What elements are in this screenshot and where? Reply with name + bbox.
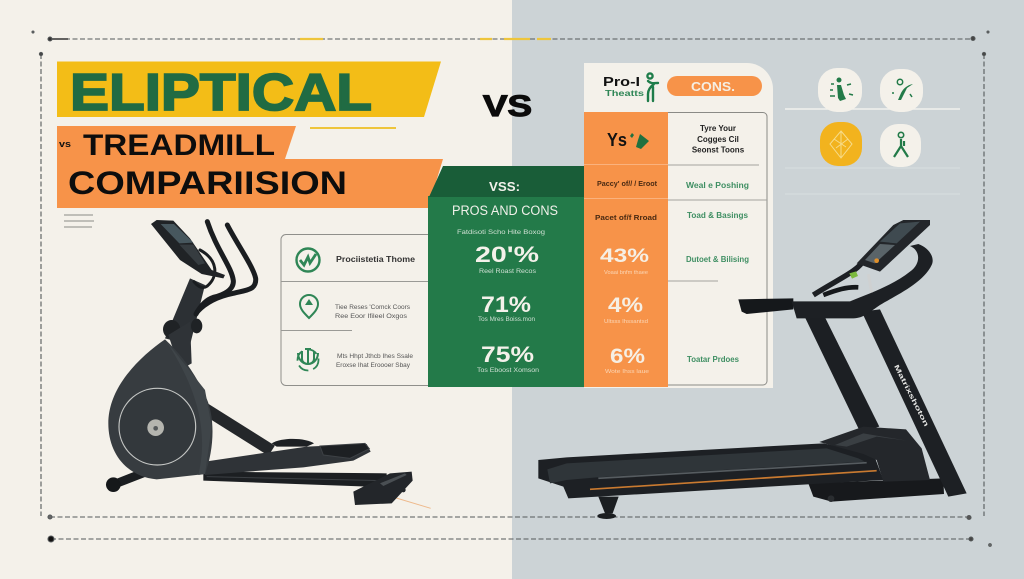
title banner: treadmill: vs bbox=[59, 139, 71, 149]
icon: anchor cup bbox=[298, 349, 318, 370]
rear rail bbox=[202, 407, 272, 451]
main upright bbox=[862, 309, 967, 497]
side rail highlight bbox=[598, 463, 867, 478]
right row labels: Dutoet & Bilising bbox=[686, 255, 749, 264]
elliptical machine bbox=[106, 220, 431, 508]
stat 43 percent bbox=[600, 246, 649, 276]
panel: left feature list bbox=[281, 234, 441, 386]
stat 75 percent: 75% bbox=[481, 342, 534, 367]
green header band bbox=[429, 166, 585, 197]
title banner: eliptical bbox=[57, 62, 441, 122]
feature label 2 bbox=[335, 304, 411, 320]
icon: yellow badge bbox=[820, 122, 862, 166]
orange header ys bbox=[607, 130, 649, 150]
vs heading: VS bbox=[483, 90, 532, 123]
background: right half bbox=[512, 0, 1024, 579]
console bbox=[151, 220, 225, 278]
menu lines icon bbox=[64, 215, 94, 227]
stat 20 percent: Reel Roast Recos bbox=[479, 269, 536, 275]
moving handles bbox=[194, 222, 256, 314]
deck bbox=[538, 443, 883, 498]
icon: exercise figure 2 bbox=[880, 69, 923, 112]
flywheel housing bbox=[108, 339, 213, 479]
running belt bbox=[547, 448, 865, 483]
pedal arm bbox=[205, 444, 371, 475]
orange row labels bbox=[595, 181, 658, 222]
console bbox=[823, 220, 930, 295]
orange row labels: Paccy' of// / Eroot bbox=[597, 181, 658, 188]
panel: pros green column bbox=[428, 166, 585, 387]
header vss: VSS: bbox=[489, 179, 520, 194]
orange floor accent bbox=[392, 497, 431, 508]
accent line bbox=[310, 127, 396, 129]
rear foot bar bbox=[353, 472, 413, 505]
feature label 3 bbox=[336, 353, 413, 369]
base frame bbox=[808, 478, 944, 502]
icon: location pin bbox=[300, 295, 318, 318]
upright brand text: Matrixshoton bbox=[892, 364, 929, 428]
title banner: comparison bbox=[57, 159, 443, 208]
pedals bbox=[272, 439, 314, 447]
stat 71 percent: Tos Mres Boiss.mon bbox=[478, 317, 535, 323]
logo text: Pro-I bbox=[603, 74, 640, 89]
stat 6 percent: 6% bbox=[610, 345, 645, 368]
base rails bbox=[203, 472, 387, 487]
background: left half bbox=[0, 0, 512, 579]
icon: green figure bbox=[647, 73, 658, 101]
treadmill machine bbox=[538, 220, 967, 519]
motor cover bbox=[819, 427, 930, 482]
right row labels: Toad & Basings bbox=[687, 211, 749, 220]
stat 75 percent bbox=[477, 342, 539, 374]
orange column bbox=[584, 112, 668, 387]
subtitle: Fatdisoti Scho Hite Boxog bbox=[457, 229, 545, 236]
title banner: treadmill: TREADMILL bbox=[83, 129, 275, 162]
handlebar bbox=[792, 244, 933, 318]
icon: check badge bbox=[296, 248, 320, 272]
feature label 2: Tiee Reses 'Comck Coors bbox=[335, 304, 411, 311]
stat 4 percent: Ultsss Ihssantsd bbox=[604, 319, 648, 325]
title banner: eliptical: ELIPTICAL bbox=[70, 64, 372, 122]
stat 43 percent: Voaai bnfm thaee bbox=[604, 270, 648, 276]
feature label 2: Ree Eoor Ifileel Oxgos bbox=[335, 313, 408, 320]
right header text: Seonst Toons bbox=[692, 146, 745, 154]
icon grid divider lines bbox=[785, 109, 960, 194]
stat 4 percent bbox=[604, 294, 648, 325]
feature label 1: Prociistetia Thome bbox=[336, 255, 416, 264]
logo text bbox=[603, 74, 645, 98]
right row labels bbox=[686, 181, 749, 364]
orange row labels: Pacet of/f Rroad bbox=[595, 215, 657, 222]
card border bbox=[668, 112, 767, 385]
logo text: Theatts bbox=[605, 89, 645, 98]
cons pill bbox=[667, 76, 762, 96]
right header text bbox=[692, 124, 745, 154]
treadmill foot bbox=[597, 497, 619, 519]
column bbox=[165, 278, 205, 345]
right row labels: Weal e Poshing bbox=[686, 181, 749, 190]
title banner: treadmill bbox=[57, 126, 296, 162]
icon: exercise figure 1 bbox=[818, 68, 862, 112]
panel: right comparison card bbox=[584, 63, 773, 388]
stat 71 percent bbox=[478, 292, 535, 323]
stat 71 percent: 71% bbox=[481, 292, 531, 317]
feature label 3: Eroxse Ihat Eroooer Sbay bbox=[336, 362, 411, 369]
front stabiliser bbox=[106, 472, 147, 492]
stat 20 percent: 20'% bbox=[475, 242, 539, 267]
stat 43 percent: 43% bbox=[600, 246, 649, 267]
rear upright bbox=[805, 317, 879, 432]
column joint bbox=[163, 319, 202, 370]
right row labels: Toatar Prdoes bbox=[687, 355, 740, 364]
stat 20 percent bbox=[475, 242, 539, 275]
title banner: comparison: COMPARIISION bbox=[68, 165, 347, 201]
stat 6 percent bbox=[605, 345, 649, 375]
orange stripe bbox=[590, 471, 877, 489]
icon: walking figure bbox=[880, 124, 921, 167]
stat 6 percent: Wote Ihss laue bbox=[605, 369, 649, 375]
stat 75 percent: Tos Eboost Xomson bbox=[477, 368, 539, 374]
flywheel disc bbox=[119, 388, 196, 465]
heading pros and cons: PROS AND CONS bbox=[452, 203, 558, 218]
side grip bbox=[813, 260, 863, 295]
orange header ys: Ys bbox=[607, 130, 627, 150]
stat 4 percent: 4% bbox=[608, 294, 643, 317]
feature label 3: Mts Hhpt Jthcb Ihes Ssale bbox=[337, 353, 413, 360]
right header text: Cogges Cil bbox=[697, 135, 739, 144]
arm rest bbox=[738, 298, 793, 314]
cons pill: CONS. bbox=[691, 79, 735, 94]
right header text: Tyre Your bbox=[700, 124, 736, 133]
